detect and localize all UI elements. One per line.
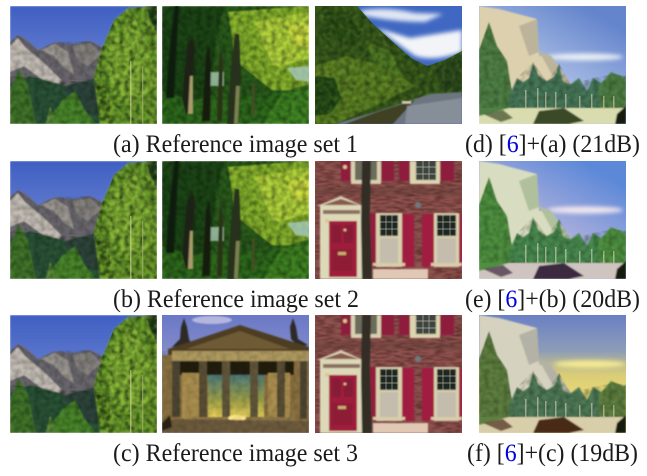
result image (e) (479, 161, 626, 279)
row 2 reference image: forest (162, 161, 309, 279)
result image (d) (479, 6, 626, 124)
caption (e): (e) [6]+(b) (20dB) (465, 286, 640, 313)
row 1 reference image: mountain (10, 6, 157, 124)
caption (a): (a) Reference image set 1 (113, 131, 358, 158)
row 2 reference image: brick house (315, 161, 462, 279)
row 1 reference image: forest (162, 6, 309, 124)
caption (b): (b) Reference image set 2 (113, 286, 359, 313)
caption (f): (f) [6]+(c) (19dB) (467, 440, 638, 467)
caption (c): (c) Reference image set 3 (113, 440, 358, 467)
result image (f) (479, 315, 626, 433)
row 3 reference image: neoclassical building (162, 315, 309, 433)
row 2 reference image: mountain (10, 161, 157, 279)
row 3 reference image: brick house (315, 315, 462, 433)
caption (d): (d) [6]+(a) (21dB) (465, 131, 640, 158)
row 3 reference image: mountain (10, 315, 157, 433)
row 1 reference image: river hillside (315, 6, 462, 124)
